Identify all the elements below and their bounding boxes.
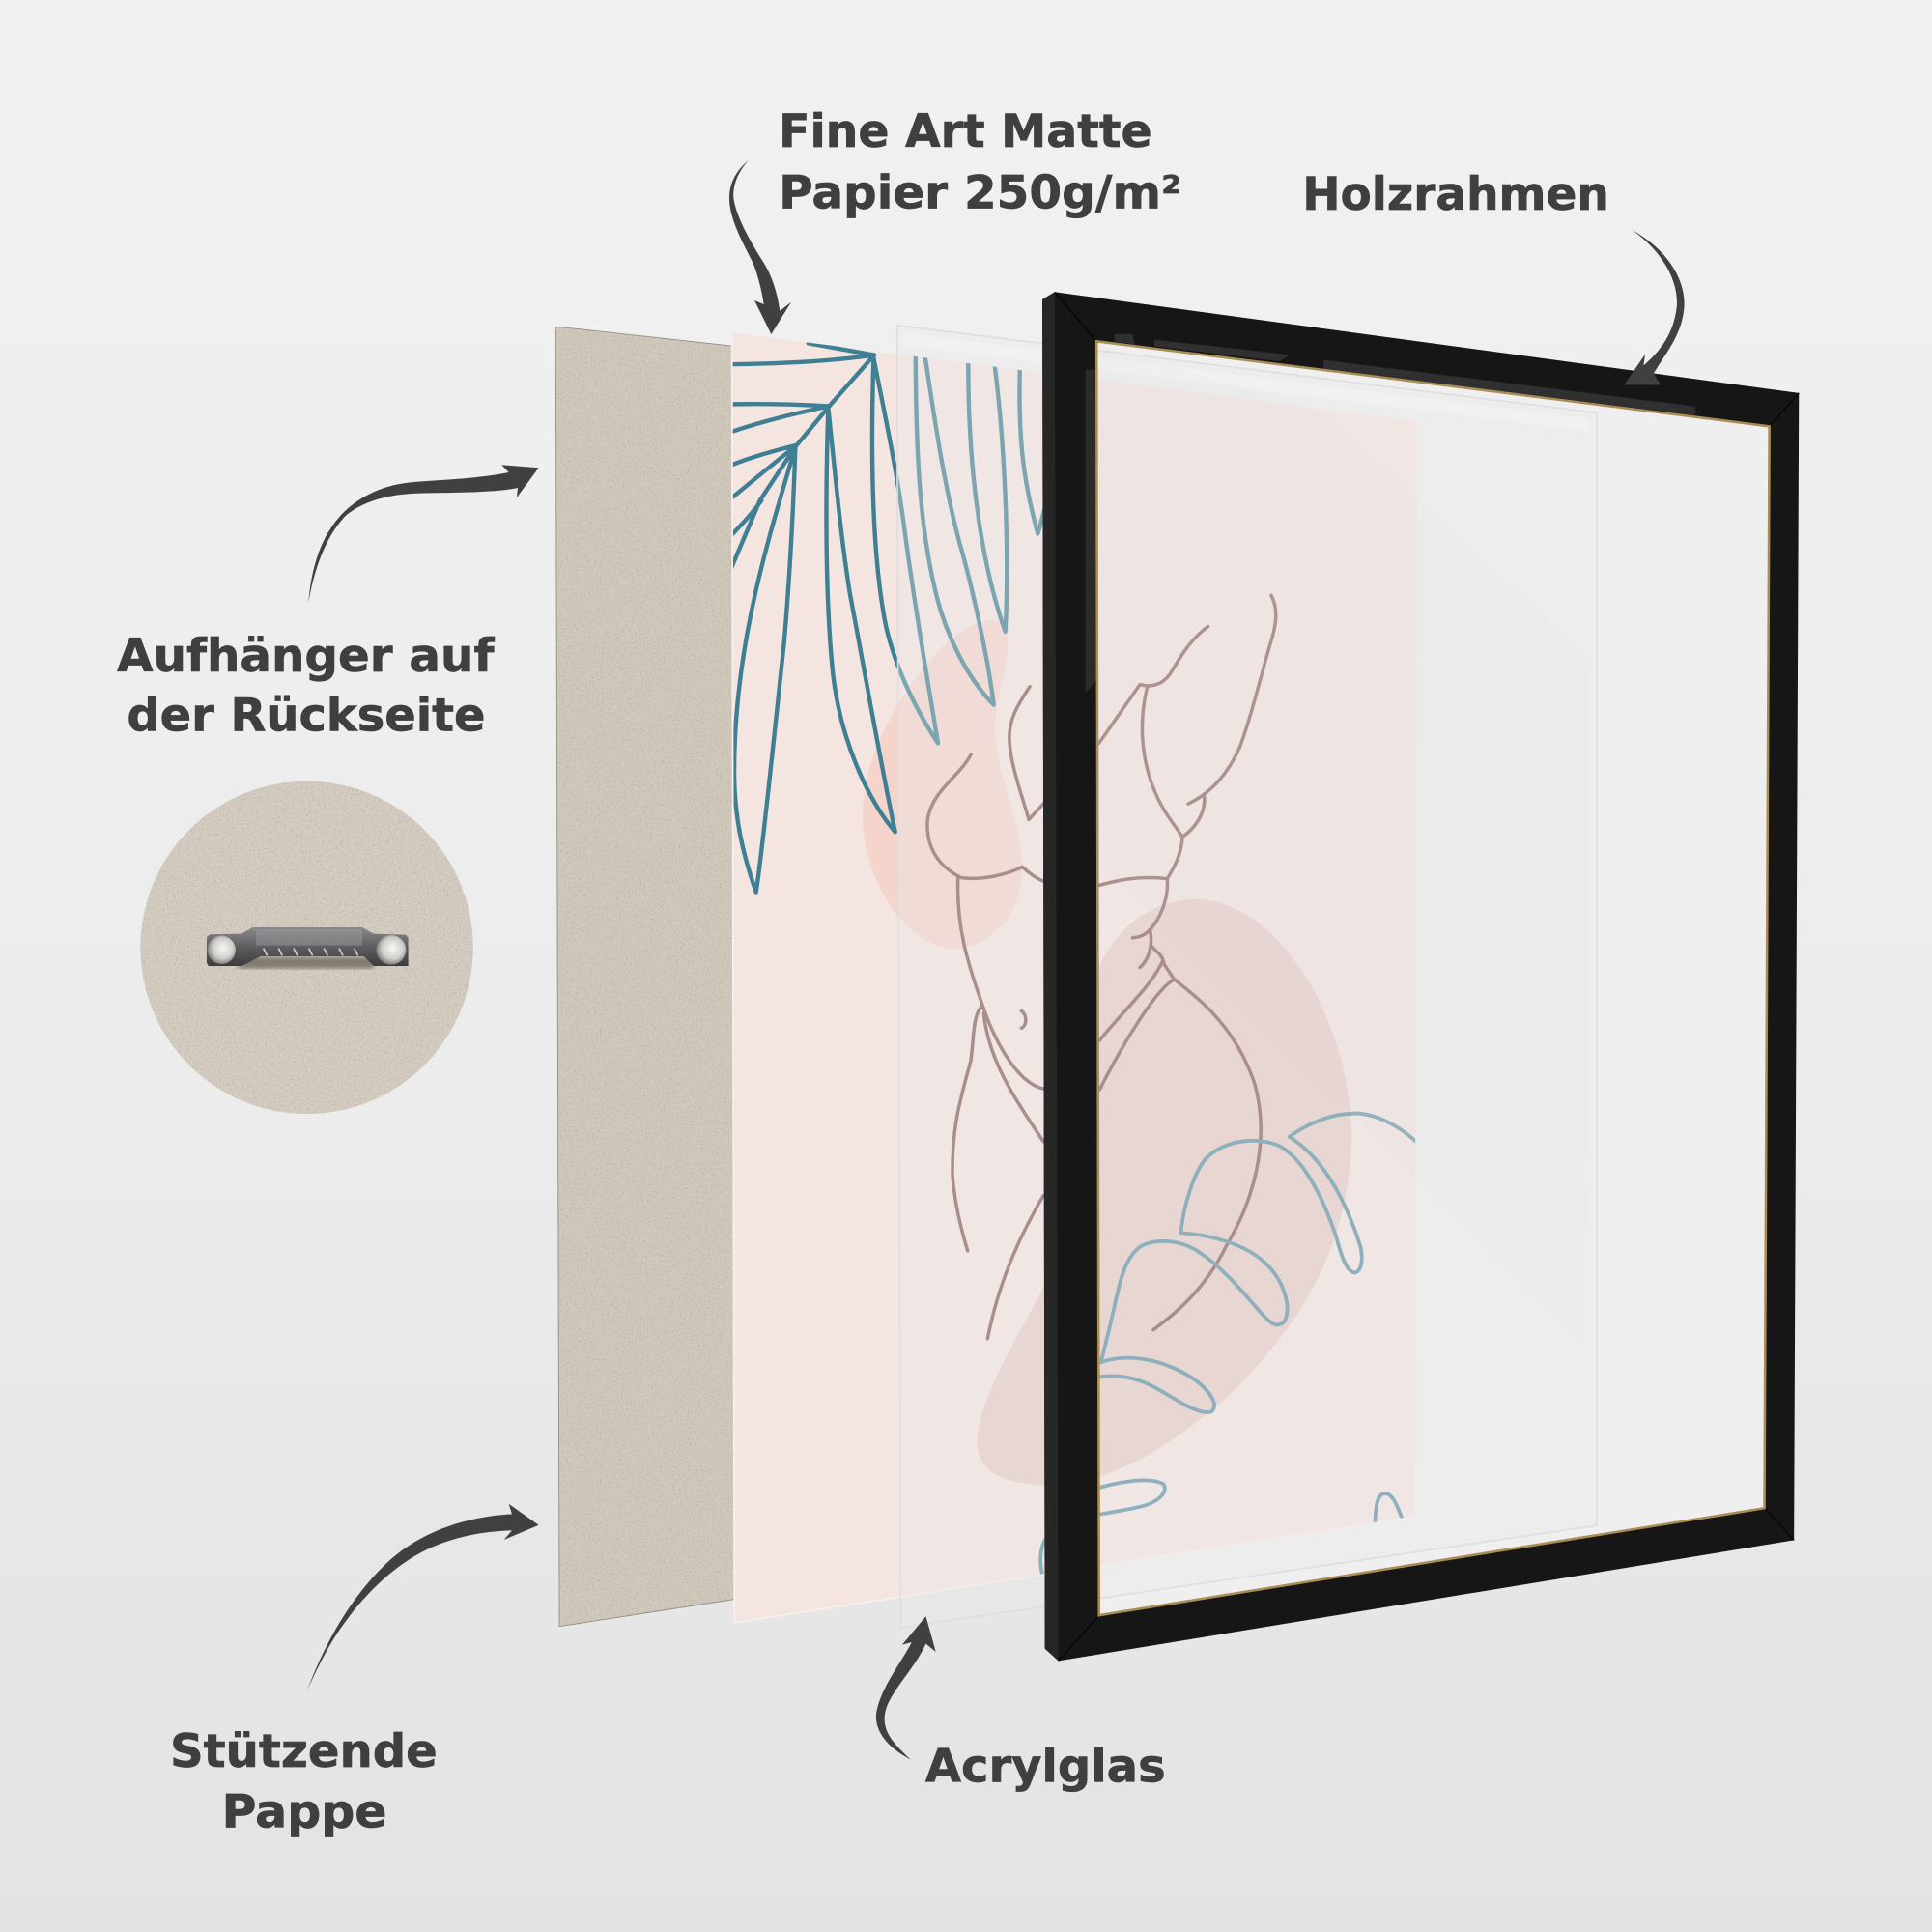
label: Aufhänger auf der Rückseite: der Rückseite [127, 689, 486, 742]
label: Stützende Pappe [170, 1725, 438, 1839]
panel: black wooden frame [1042, 292, 1799, 1661]
paper edge highlight [732, 332, 1414, 1623]
label: Aufhänger auf der Rückseite: Aufhänger auf [117, 630, 495, 683]
label: Stützende Pappe: Pappe [222, 1786, 387, 1839]
panel: acrylic glass sheet [897, 326, 1597, 1628]
arrow: to cardboard lower [307, 1504, 539, 1691]
label: Fine Art Matte Papier: Fine Art Matte [779, 105, 1152, 158]
panel: backing cardboard [555, 327, 734, 1627]
arrow: to paper [729, 160, 791, 334]
arrow: to frame [1624, 230, 1685, 384]
panel: fine art paper print [731, 332, 1422, 1623]
label: Fine Art Matte Papier: Papier 250g/m² [779, 167, 1181, 220]
label: Aufhänger auf der Rückseite [117, 630, 495, 742]
frame interior backdrop [1096, 341, 1770, 1615]
label: Stützende Pappe: Stützende [170, 1725, 438, 1778]
label: Acrylglas: Acrylglas [925, 1740, 1166, 1793]
arrow: to acrylic glass [876, 1616, 936, 1760]
label: Holzrahmen: Holzrahmen [1302, 168, 1609, 221]
arrow: to cardboard upper [308, 465, 539, 603]
icon: hanger on cardboard circle [140, 781, 473, 1114]
label: Fine Art Matte Papier [779, 105, 1181, 220]
